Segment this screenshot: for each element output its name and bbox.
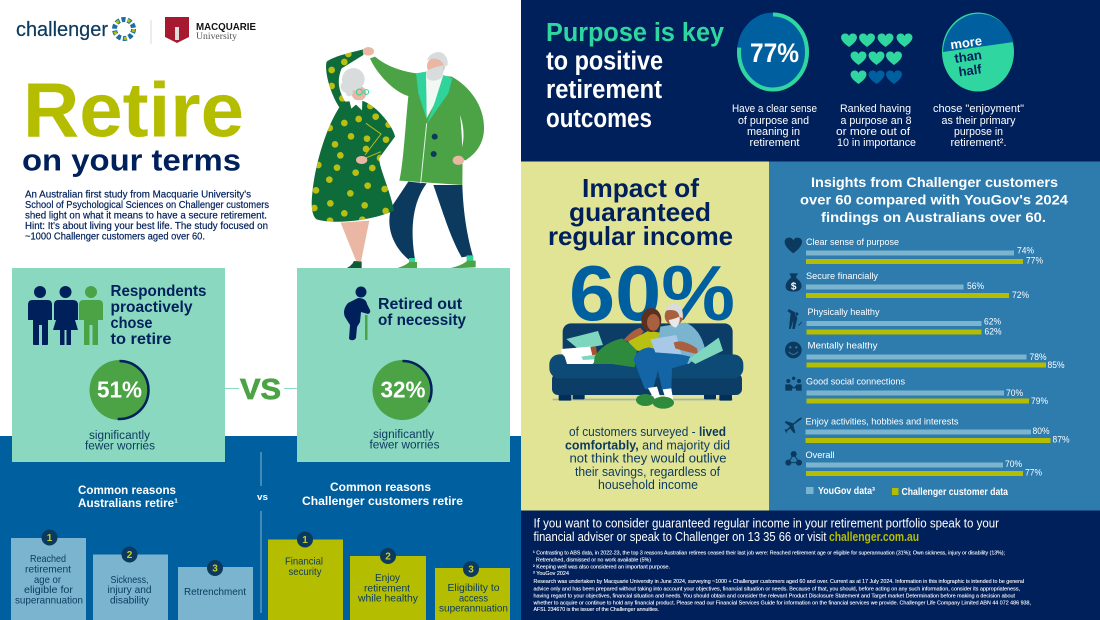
pie: more than half xyxy=(942,12,1014,92)
icon: golfer xyxy=(787,309,802,329)
heading: respondents: proactively xyxy=(110,299,193,316)
podium: Challenger customers: while healthy xyxy=(357,592,419,604)
podium: Australians: age or xyxy=(34,574,61,586)
row: overall: 70% xyxy=(1005,459,1022,470)
podium: Challenger customers: 2 xyxy=(385,552,391,562)
podium: Australians: superannuation xyxy=(15,594,83,606)
icon: social people xyxy=(785,377,802,391)
row: enjoy activities xyxy=(806,416,1070,446)
heading: purpose: to positive xyxy=(546,48,663,76)
heading: impact: regular income xyxy=(548,221,733,251)
podium: Challenger customers: Eligibility to xyxy=(448,582,500,594)
text: lived comfortably xyxy=(565,425,730,492)
row: clear sense of purpose: 74% xyxy=(1017,246,1034,256)
caption: clear sense of purpose: retirement xyxy=(750,137,800,149)
row: good social connections xyxy=(806,376,1048,407)
caption: ranked having a purpose: Ranked having xyxy=(840,103,911,115)
row: physically healthy: 62% xyxy=(984,326,1002,338)
heading: retired out of necessity: of necessity xyxy=(378,312,466,329)
ring: 77% xyxy=(737,12,809,92)
intro text: School of Psychological Sciences on Challenger customers xyxy=(25,199,269,211)
heading: insights xyxy=(800,174,1068,225)
caption: ranked having a purpose: 10 in importance xyxy=(837,137,916,149)
podium: Australians: 3 xyxy=(212,564,218,574)
podium: Challenger customers: 1 xyxy=(302,535,308,546)
caption: fewer worries: fewer worries xyxy=(85,440,155,452)
row: overall xyxy=(806,450,1042,478)
footnotes and disclaimer: advice only and has been prepared without taking into account your objectives, financial situation or needs. Because of that, you should, before acting on any such information, consider its appropriateness, xyxy=(534,586,1020,592)
podium: Challenger customers: retirement xyxy=(364,582,410,594)
row: secure financially: Secure financially xyxy=(806,271,878,282)
icon: network xyxy=(785,451,802,466)
pie: more than half: half xyxy=(958,61,983,79)
logo: Macquarie University xyxy=(150,17,256,44)
donut: 51%: 51% xyxy=(97,376,142,402)
divider with vs: vs xyxy=(257,492,268,502)
footnotes and disclaimer: ³ YouGov 2024 xyxy=(533,571,569,577)
legend: YouGov data³ xyxy=(818,486,876,497)
caption: clear sense of purpose: Have a clear sense xyxy=(732,103,817,115)
podium: Australians: disability xyxy=(110,594,150,606)
legend xyxy=(806,486,1008,498)
panel: proactively chose to retire xyxy=(12,268,225,462)
illustration: couple on sofa xyxy=(549,304,743,409)
row: good social connections: Good social connections xyxy=(806,376,905,388)
caption: fewer worries xyxy=(85,430,155,452)
podium: Challenger customers: 3 xyxy=(468,564,474,576)
footnotes and disclaimer: ¹ Contrasting to ABS data, in 2022-23, the top 3 reasons Australian retirees ceased their last job were: Reached retirement age or eligible for superannuation (31%); Own sickness, injury or disability (13%); xyxy=(533,550,1005,556)
podium: Australians xyxy=(11,530,253,620)
row: secure financially: 56% xyxy=(967,281,984,292)
heading: insights: over 60 compared with YouGov's 2024 xyxy=(800,192,1068,208)
call to action: challenger.com.au xyxy=(829,530,919,544)
title: Retire xyxy=(23,68,244,154)
heading: insights: Insights from Challenger customers xyxy=(811,174,1058,190)
footnotes and disclaimer: Retrenched, dismissed or no work available (5%) xyxy=(536,558,651,564)
podium: Australians: retirement xyxy=(25,564,71,576)
text: lived comfortably: of customers surveyed - lived xyxy=(569,425,726,439)
podium: Challenger customers xyxy=(268,532,510,620)
stat: 60%: 60% xyxy=(569,249,735,337)
row: enjoy activities: 87% xyxy=(1052,434,1070,446)
row: mentally healthy: 78% xyxy=(1030,352,1047,363)
donut: 32%: 32% xyxy=(380,376,426,402)
podium: Australians: 1 xyxy=(47,533,53,544)
icon: airplane xyxy=(785,418,802,434)
icon: three people xyxy=(28,286,103,345)
icon: hearts 7 of 10 xyxy=(841,33,912,84)
heading: respondents: Respondents xyxy=(110,283,206,300)
panel: purpose is key xyxy=(521,0,1100,162)
row: mentally healthy: Mentally healthy xyxy=(808,340,878,352)
footnotes and disclaimer: having regard to your objectives, financial situation and needs. You should obtain and consider the relevant Product Disclosure Statement and Target market Determination before making a decision about xyxy=(534,594,1015,600)
row: enjoy activities: 80% xyxy=(1032,426,1050,437)
heading: retired out of necessity xyxy=(378,296,466,329)
row: mentally healthy: 85% xyxy=(1048,360,1065,371)
caption: clear sense of purpose xyxy=(732,103,817,149)
pie: more than half: than xyxy=(953,47,983,66)
caption: chose enjoyment xyxy=(933,103,1024,149)
icon: person with cane xyxy=(344,286,370,340)
caption: clear sense of purpose: of purpose and xyxy=(738,115,809,127)
caption: chose enjoyment: retirement². xyxy=(950,137,1006,149)
intro text: shed light on what it means to have a secure retirement. xyxy=(25,210,267,222)
text: lived comfortably: their savings, regardless of xyxy=(575,465,720,479)
caption: fewer worries xyxy=(370,429,440,452)
row: secure financially: 72% xyxy=(1012,290,1029,301)
panel: retired out of necessity xyxy=(297,268,510,462)
call to action: financial adviser or speak to Challenger on 13 35 66 or visit xyxy=(534,530,827,544)
heading: Challenger customers retire: Common reasons xyxy=(330,480,431,494)
panel: left retirement overview xyxy=(0,0,521,620)
row: overall: Overall xyxy=(806,450,834,461)
panel: impact of guaranteed regular income xyxy=(521,162,769,510)
icons: chart rows xyxy=(785,238,802,466)
heading: respondents xyxy=(110,283,206,348)
row: clear sense of purpose xyxy=(806,237,1043,266)
icon: smiley xyxy=(785,342,802,358)
podium: Challenger customers: Enjoy xyxy=(375,572,401,584)
podium: Australians: injury and xyxy=(108,584,152,596)
call to action: If you want to consider guaranteed regular income in your retirement portfolio speak to your xyxy=(534,516,999,530)
podium: Australians: Reached xyxy=(30,553,66,565)
footnotes and disclaimer xyxy=(533,550,1031,613)
caption: ranked having a purpose: or more out of xyxy=(836,126,911,138)
podium: Australians: Retrenchment xyxy=(184,586,246,598)
podium: Australians: eligible for xyxy=(24,584,74,596)
row: secure financially xyxy=(806,271,1029,301)
panel: insights from Challenger customers xyxy=(769,162,1100,510)
podium: Australians: Sickness, xyxy=(110,574,148,586)
ring: 77%: 77% xyxy=(750,38,799,68)
podium: Australians: 2 xyxy=(127,550,133,561)
footnotes and disclaimer: whether to acquire or continue to hold any financial product. Please read our Financial Services Guide for information on the financial services we provide. Challenger Life Company Limited ABN 44 072 486 938, xyxy=(533,601,1031,607)
footnotes and disclaimer: AFSL 234670 is the issuer of the Challenger annuities. xyxy=(534,607,659,613)
bar chart: YouGov vs Challenger xyxy=(806,237,1070,478)
panel: call to action and disclaimer xyxy=(521,510,1100,620)
caption: chose enjoyment: chose "enjoyment" xyxy=(933,103,1024,115)
caption: clear sense of purpose: meaning in xyxy=(747,126,800,138)
text: lived comfortably: not think they would outlive xyxy=(570,452,727,466)
heading: impact: guaranteed xyxy=(569,197,711,227)
logo: Macquarie University: University xyxy=(196,32,237,42)
heading: Challenger customers retire: Challenger customers retire xyxy=(302,494,463,508)
heading: insights: findings on Australians over 60. xyxy=(821,209,1046,225)
caption: chose enjoyment: as their primary xyxy=(942,115,1016,127)
row: good social connections: 79% xyxy=(1031,396,1048,407)
caption: fewer worries: fewer worries xyxy=(370,440,440,452)
heading: impact: Impact of xyxy=(582,173,699,203)
heading: purpose: Purpose is key xyxy=(546,19,725,47)
caption: fewer worries: significantly xyxy=(89,430,150,442)
intro text: An Australian first study from Macquarie University's xyxy=(25,188,251,200)
intro text xyxy=(25,188,269,242)
intro text: Hint: It's about living your best life. The study focused on xyxy=(25,220,268,232)
row: mentally healthy xyxy=(806,340,1065,371)
heading: Australians retire: Australians retire¹ xyxy=(78,496,178,510)
logo: Challenger: challenger xyxy=(16,18,108,41)
row: physically healthy: 62% xyxy=(984,316,1001,328)
icon: heart xyxy=(785,238,802,253)
heading: purpose: retirement xyxy=(546,76,662,104)
text: lived comfortably: comfortably, and majority did xyxy=(565,438,730,452)
row: clear sense of purpose: Clear sense of purpose xyxy=(806,237,899,248)
icon: money bag xyxy=(786,273,802,292)
podium: Challenger customers: access xyxy=(459,592,488,604)
title: on your terms xyxy=(22,142,241,178)
row: good social connections: 70% xyxy=(1006,388,1023,399)
vs badge: VS xyxy=(240,374,281,406)
caption: chose enjoyment: purpose in xyxy=(954,126,1003,138)
intro text: ~1000 Challenger customers aged over 60. xyxy=(25,230,205,242)
illustration: dancing couple xyxy=(311,47,484,270)
heading: respondents: chose xyxy=(110,315,153,332)
heading: purpose xyxy=(546,19,725,133)
heading: Challenger customers retire xyxy=(302,480,463,508)
caption: ranked having a purpose: a purpose an 8 xyxy=(840,115,912,127)
vs badge xyxy=(225,374,297,406)
heading: Australians retire xyxy=(78,483,178,510)
icon: money bag: $ xyxy=(791,281,797,292)
heading: retired out of necessity: Retired out xyxy=(378,296,462,313)
donut: 32% xyxy=(372,360,432,420)
heading: respondents: to retire xyxy=(110,331,172,348)
footnotes and disclaimer: Research was undertaken by Macquarie University in June 2024, surveying ~1000 + Challenger customers aged 60 and over. Current as at 17 July 2024. Information in this infographic is intended to be general xyxy=(534,579,1024,585)
row: clear sense of purpose: 77% xyxy=(1026,256,1043,266)
heading: purpose: outcomes xyxy=(546,105,652,133)
podium: Challenger customers: superannuation xyxy=(439,602,508,614)
pie: more than half: more xyxy=(949,33,983,52)
caption: fewer worries: significantly xyxy=(373,429,434,441)
podium: Challenger customers: Financial xyxy=(285,556,323,568)
row: physically healthy: Physically healthy xyxy=(808,307,880,318)
row: physically healthy xyxy=(806,307,1002,338)
podium: Challenger customers: security xyxy=(288,566,322,578)
footnotes and disclaimer: ² Keeping well was also considered an important purpose. xyxy=(533,564,670,570)
heading: impact xyxy=(548,173,733,251)
row: overall: 77% xyxy=(1025,468,1042,478)
heading: Australians retire: Common reasons xyxy=(78,483,176,497)
row: enjoy activities: Enjoy activities, hobbies and interests xyxy=(806,416,959,428)
call to action xyxy=(534,516,999,544)
text: lived comfortably: household income xyxy=(598,478,698,492)
legend: Challenger customer data xyxy=(902,487,1008,498)
donut: 51% xyxy=(90,360,150,420)
caption: ranked having a purpose xyxy=(836,103,916,149)
logo: Macquarie University: MACQUARIE xyxy=(196,21,256,33)
